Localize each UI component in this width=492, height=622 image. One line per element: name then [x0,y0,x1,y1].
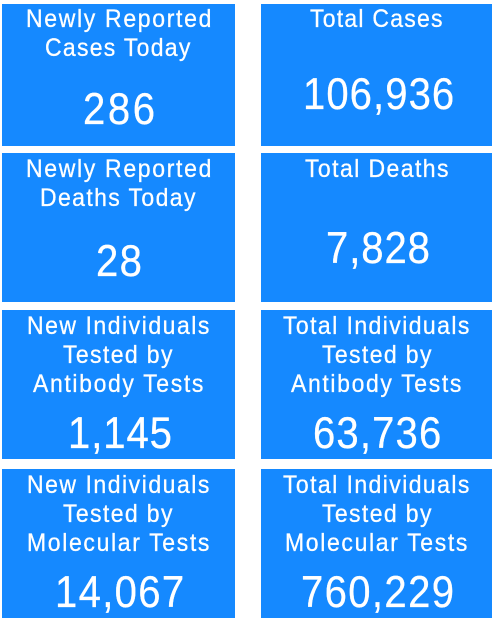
panel: total individuals tested by antibody tests: Total Individuals [283,312,469,340]
panel: total individuals tested by molecular tests: Molecular Tests [285,529,467,557]
panel: new individuals tested by antibody tests [2,310,235,459]
panel: total individuals tested by antibody tests: 63,736 [313,408,441,457]
panel: newly reported deaths today: Newly Reported [26,155,211,183]
panel: total cases [261,4,492,146]
panel: new individuals tested by antibody tests: Antibody Tests [33,370,203,398]
panel: total deaths [261,153,492,302]
panel: new individuals tested by antibody tests: New Individuals [27,312,209,340]
panel: new individuals tested by antibody tests: 1,145 [68,408,172,457]
panel: total cases: Total Cases [310,5,442,33]
panel: newly reported deaths today: 28 [96,236,142,285]
panel: total individuals tested by molecular tests [261,469,492,618]
panel: total individuals tested by antibody tests: Antibody Tests [291,370,461,398]
panel: newly reported cases today [2,4,235,146]
panel: newly reported cases today: 286 [83,84,155,133]
panel: new individuals tested by molecular tests: Tested by [63,500,172,528]
panel: new individuals tested by molecular tests: Molecular Tests [27,529,209,557]
panel: total deaths: 7,828 [326,223,430,272]
panel: new individuals tested by antibody tests: Tested by [63,341,172,369]
panel: newly reported deaths today [2,153,235,302]
panel: new individuals tested by molecular tests: New Individuals [27,471,209,499]
panel: total individuals tested by molecular tests: Total Individuals [283,471,469,499]
panel: total individuals tested by antibody tests [261,310,492,459]
panel: newly reported deaths today: Deaths Today [40,184,195,212]
panel: total individuals tested by molecular tests: Tested by [322,500,431,528]
panel: total individuals tested by molecular tests: 760,229 [301,567,454,616]
panel: new individuals tested by molecular tests [2,469,235,618]
panel: newly reported cases today: Cases Today [45,34,190,62]
panel: total individuals tested by antibody tests: Tested by [322,341,431,369]
panel: newly reported cases today: Newly Reported [26,5,211,33]
panel: total deaths: Total Deaths [305,155,449,183]
panel: new individuals tested by molecular tests: 14,067 [55,567,184,616]
panel: total cases: 106,936 [303,69,454,118]
